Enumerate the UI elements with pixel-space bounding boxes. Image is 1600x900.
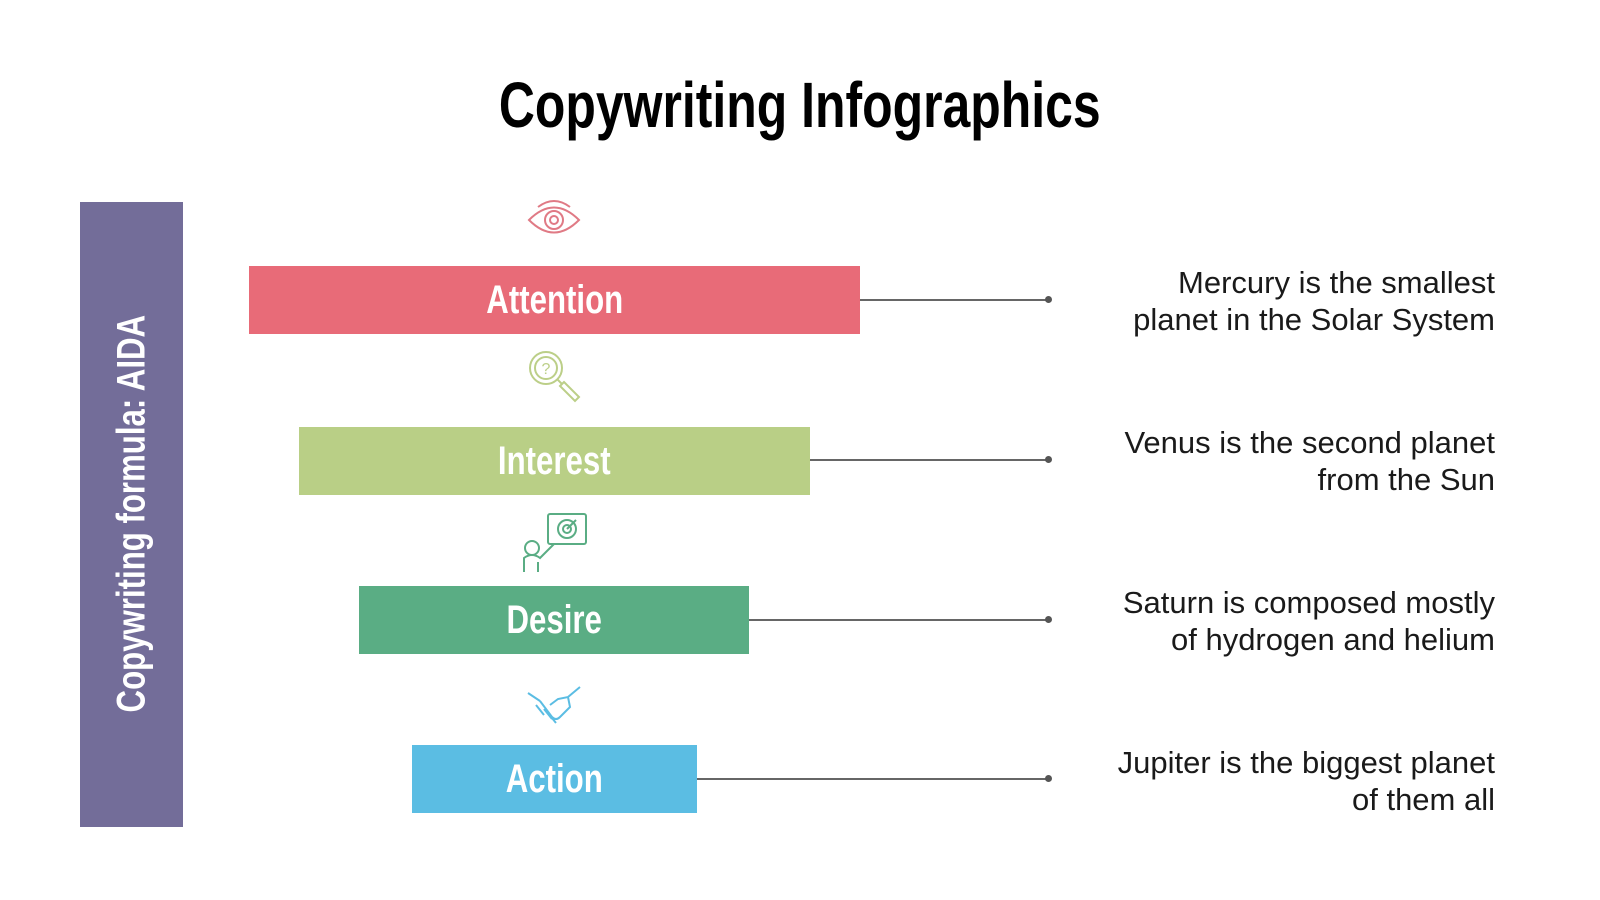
text 2 <box>1124 425 1495 497</box>
text 1: planet in the Solar System <box>1133 302 1495 337</box>
text 1 <box>1133 265 1495 337</box>
connector 3 <box>749 616 1052 623</box>
bar: Desire: Desire <box>506 598 602 642</box>
bar: Desire <box>359 586 749 654</box>
bar: Attention: Attention <box>486 278 623 322</box>
text 2: Venus is the second planet <box>1124 425 1495 460</box>
sidebar: vertical label: Copywriting formula: AIDA <box>110 315 154 713</box>
text 3 <box>1123 585 1495 657</box>
icon: eye <box>528 200 580 234</box>
bar: Action <box>412 745 697 813</box>
text 4: of them all <box>1352 782 1495 817</box>
bar: Interest: Interest <box>498 438 611 482</box>
sidebar: vertical label <box>80 202 183 827</box>
connector 1 <box>860 296 1052 303</box>
bar: Attention <box>249 266 860 334</box>
title: Copywriting Infographics <box>499 69 1101 141</box>
text 1: Mercury is the smallest <box>1178 265 1495 300</box>
text 3: of hydrogen and helium <box>1171 622 1495 657</box>
icon: presenter with target <box>523 513 587 572</box>
bar: Action: Action <box>506 756 603 800</box>
icon: magnifier <box>529 351 580 402</box>
connector 4 <box>697 775 1052 782</box>
text 4: Jupiter is the biggest planet <box>1118 745 1495 780</box>
connector 2 <box>810 456 1052 463</box>
text 2: from the Sun <box>1318 462 1495 497</box>
text 4 <box>1118 745 1495 817</box>
icon: magnifier: ? <box>542 361 551 378</box>
text 3: Saturn is composed mostly <box>1123 585 1495 620</box>
bar: Interest <box>299 427 810 495</box>
icon: handshake <box>528 686 581 724</box>
